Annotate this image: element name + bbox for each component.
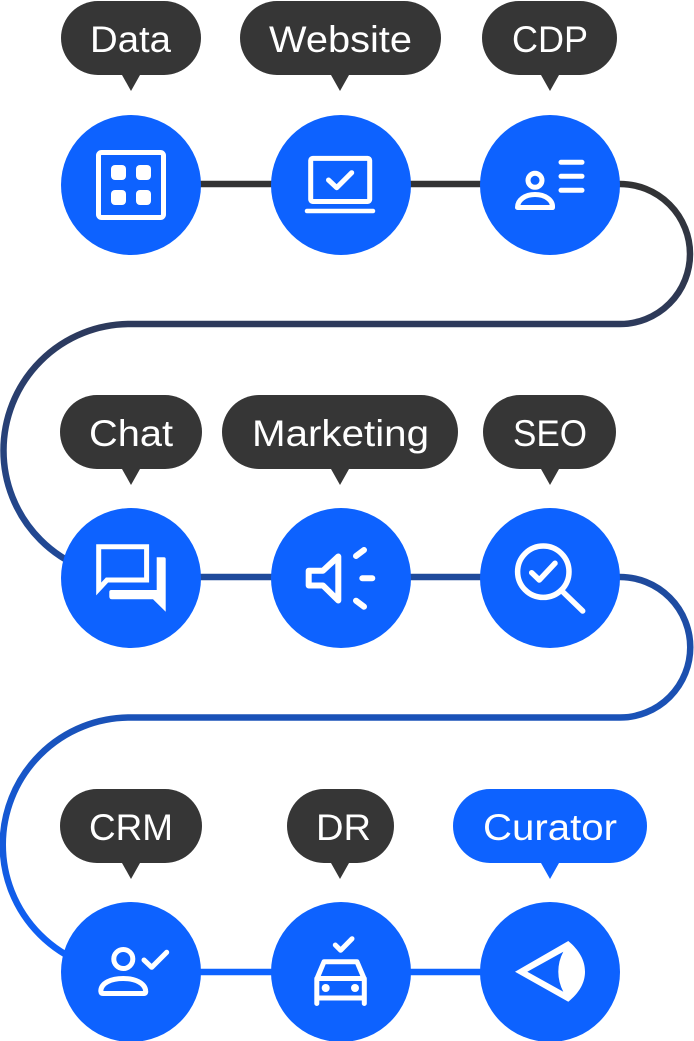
label: Curator	[453, 789, 647, 879]
connector path	[3, 184, 690, 972]
node: Data	[61, 115, 201, 255]
label: CDP	[482, 1, 617, 91]
step: Chat	[60, 395, 202, 648]
label: Marketing	[222, 395, 458, 485]
node: Chat	[61, 508, 201, 648]
node: CRM	[61, 902, 201, 1041]
step: Website	[240, 1, 441, 255]
label: Chat	[60, 395, 202, 485]
icon: eye	[515, 941, 585, 1002]
label: Data: Data	[90, 19, 171, 60]
step: Data	[61, 1, 201, 255]
label: Marketing: Marketing	[252, 413, 429, 454]
icon: laptop with check	[307, 158, 373, 211]
step: CDP	[480, 1, 620, 255]
label: SEO: SEO	[513, 413, 587, 454]
icon: grid	[98, 152, 164, 218]
icon: user with check	[101, 950, 167, 994]
icon: car with check	[317, 939, 364, 1004]
node: Curator	[480, 902, 620, 1041]
node: Marketing	[271, 508, 411, 648]
icon: megaphone	[309, 550, 372, 607]
node: SEO	[480, 508, 620, 648]
step: SEO	[480, 395, 620, 648]
label: CRM	[60, 789, 202, 879]
label: Curator: Curator	[483, 807, 617, 848]
step: CRM	[60, 789, 202, 1041]
label: Chat: Chat	[89, 413, 174, 454]
node: DR	[271, 902, 411, 1041]
node: Website	[271, 115, 411, 255]
label: SEO	[483, 395, 616, 485]
label: CRM: CRM	[89, 807, 173, 848]
label: DR	[287, 789, 394, 879]
label: Website: Website	[269, 19, 412, 60]
icon: magnifier with check	[518, 546, 583, 611]
label: Website	[240, 1, 441, 91]
step: DR	[271, 789, 411, 1041]
label: Data	[61, 1, 201, 91]
label: CDP: CDP	[512, 19, 588, 60]
icon: chat bubbles	[99, 547, 166, 612]
step: Marketing	[222, 395, 458, 648]
step: Curator	[453, 789, 647, 1041]
label: DR: DR	[316, 807, 371, 848]
node: CDP	[480, 115, 620, 255]
icon: profile list	[518, 162, 582, 208]
